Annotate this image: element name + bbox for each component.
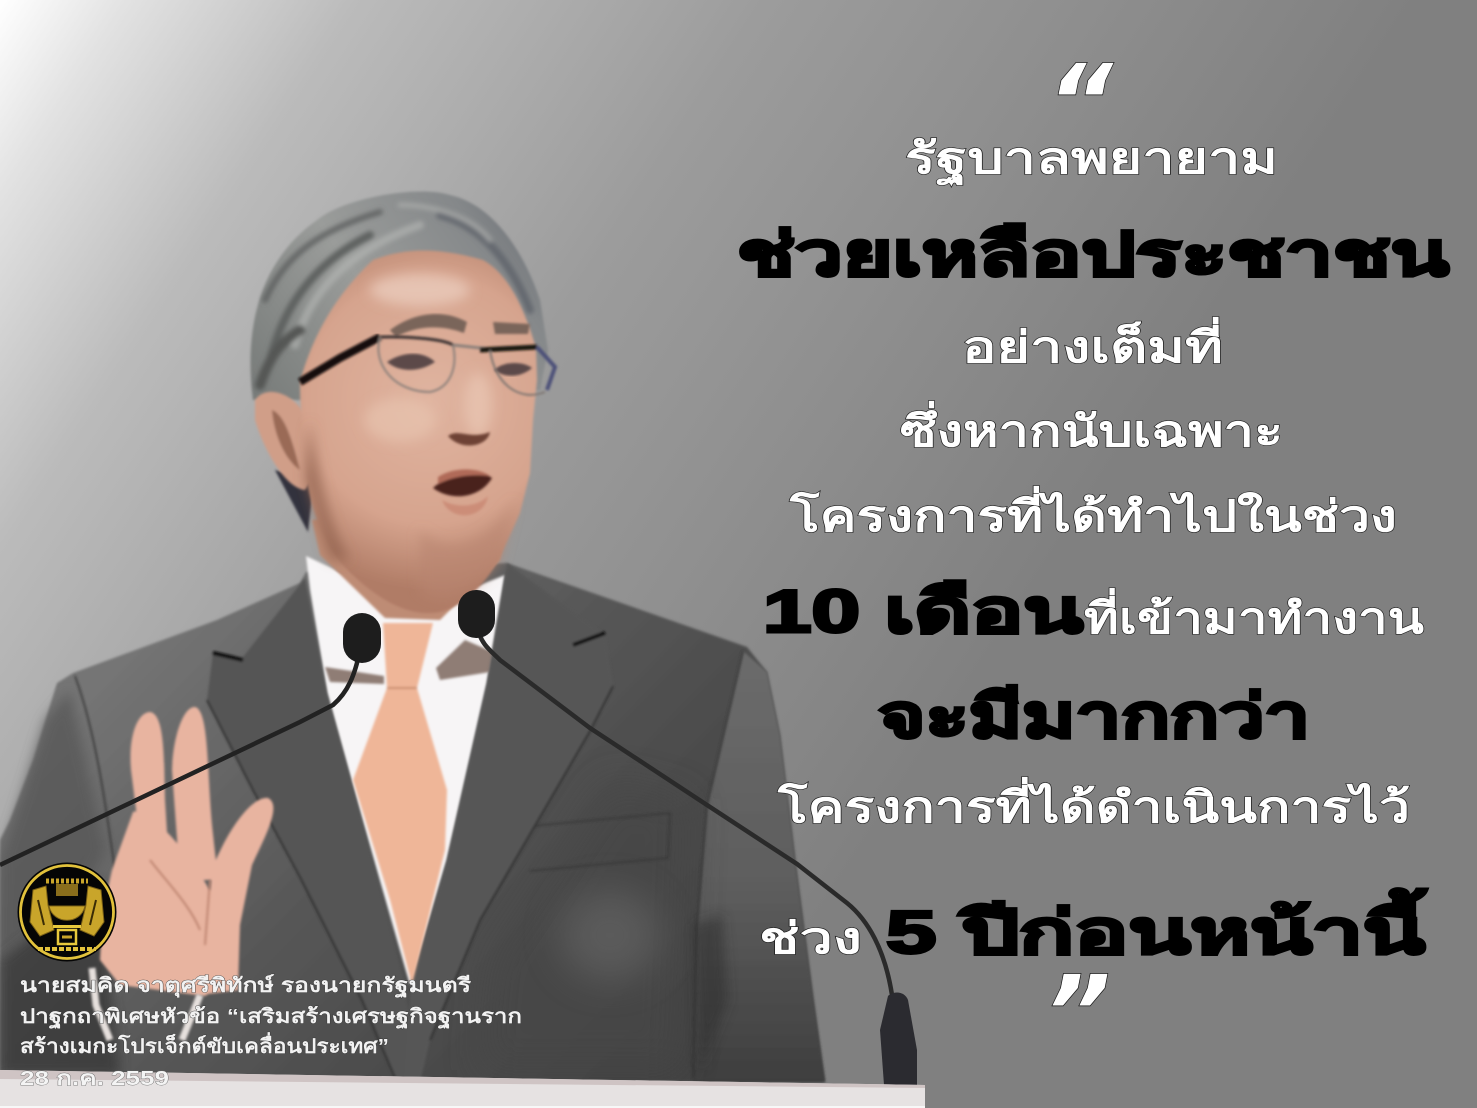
hair streaks xyxy=(260,205,530,385)
line: help the people: ช่วยเหลือประชาชน xyxy=(737,221,1449,288)
closing quotation mark: ” xyxy=(1045,954,1111,1073)
lapels xyxy=(207,563,613,1082)
caption: date: 28 ก.ค. 2559 xyxy=(20,1068,169,1090)
shirt cuff xyxy=(92,968,200,1040)
eyes xyxy=(387,354,532,376)
portrait: speaker at lectern xyxy=(0,191,925,1108)
jacket xyxy=(0,563,825,1082)
tie xyxy=(353,623,447,985)
line: projects carried out: โครงการที่ได้ดำเนินการไว้ xyxy=(777,777,1410,832)
seams and pocket xyxy=(75,651,743,1078)
emblem: Government seal xyxy=(18,862,116,962)
line: government tries: รัฐบาลพยายาม xyxy=(905,135,1278,186)
quote text xyxy=(737,135,1449,966)
face xyxy=(300,251,537,613)
glasses xyxy=(300,337,555,395)
dark hair behind neck xyxy=(275,470,314,532)
line: fully: อย่างเต็มที่ xyxy=(962,317,1223,372)
shirt xyxy=(306,556,505,985)
caption: speaker name: นายสมคิด จาตุศรีพิทักษ์ รองนายกรัฐมนตรี xyxy=(20,974,471,999)
line: will be more than: จะมีมากกว่า xyxy=(878,683,1310,750)
collar shadow xyxy=(325,640,493,684)
line: 5 years before: 5 ปีก่อนหน้านี้ xyxy=(886,888,1428,966)
line: projects done during: โครงการที่ได้ทำไปในช่วง xyxy=(789,486,1397,541)
left sleeve shading xyxy=(0,690,105,960)
caption xyxy=(20,974,522,1090)
microphone left xyxy=(0,613,381,865)
right sleeve xyxy=(693,651,825,1082)
caption: keynote title continued: สร้างเมกะโปรเจ็กต์ขับเคลื่อนประเทศ” xyxy=(20,1031,389,1058)
eyebrows xyxy=(390,314,530,337)
line: if counted: ซึ่งหากนับเฉพาะ xyxy=(900,401,1283,456)
line: period: ช่วง xyxy=(759,915,862,963)
body shading xyxy=(480,780,690,1070)
hand xyxy=(100,707,273,996)
line: 10 months highlight: 10 เดือน xyxy=(763,578,1083,645)
neck xyxy=(312,500,510,620)
caption: keynote title: ปาฐกถาพิเศษหัวข้อ “เสริมสร้างเศรษฐกิจฐานราก xyxy=(20,1005,522,1030)
nose and mouth xyxy=(433,432,492,515)
hair back xyxy=(251,191,548,400)
line: since taking office: ที่เข้ามาทำงาน xyxy=(1084,588,1425,643)
ear xyxy=(255,392,312,490)
face shading xyxy=(305,274,515,598)
opening quotation mark: “ xyxy=(1047,43,1114,162)
lectern xyxy=(0,1070,925,1108)
microphone right xyxy=(458,590,917,1085)
